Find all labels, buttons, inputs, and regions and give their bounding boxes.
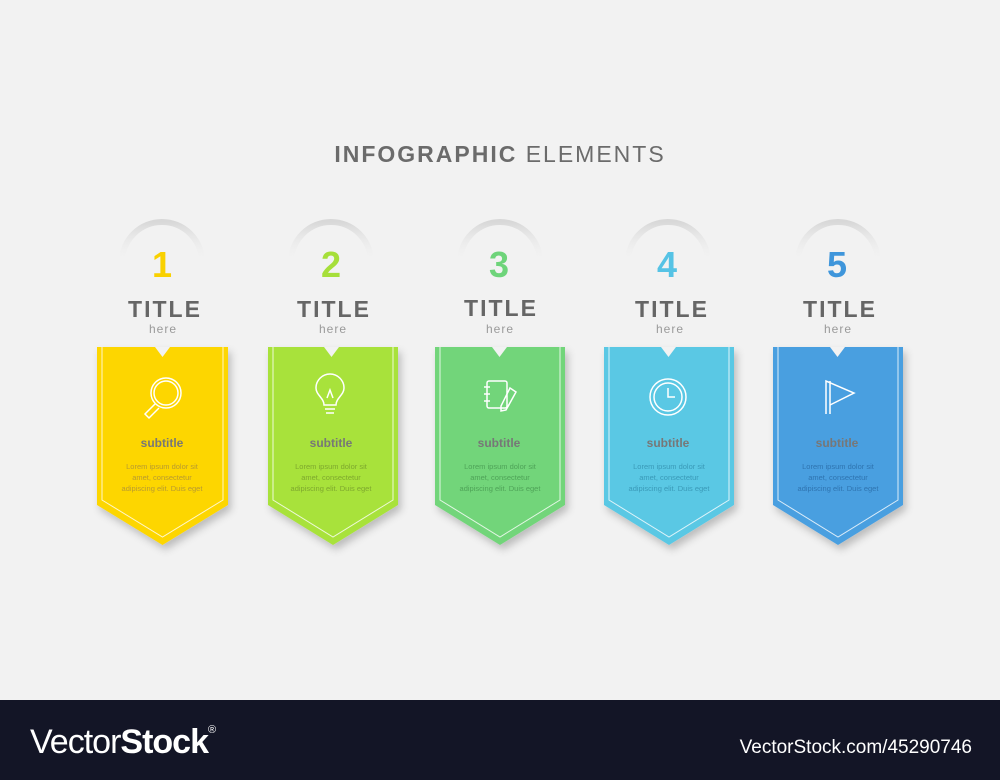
card 5: Lorem ipsum dolor sit <box>802 462 875 471</box>
card 2 <box>268 222 398 545</box>
card 4 <box>604 222 734 545</box>
card 1: amet, consectetur <box>132 473 192 482</box>
icon: flag <box>826 381 854 414</box>
icon: bulb <box>316 374 344 413</box>
card 4: 4 <box>657 244 677 285</box>
card 1: adipiscing elit. Duis eget <box>122 484 203 493</box>
card 2: Lorem ipsum dolor sit <box>295 462 368 471</box>
icon: notebook <box>484 381 516 411</box>
card 1: subtitle <box>141 436 184 450</box>
card 5: 5 <box>827 244 847 285</box>
card 2: subtitle <box>310 436 353 450</box>
icon: magnifier <box>145 378 181 418</box>
footer bar <box>0 700 1000 780</box>
card 5 <box>773 222 903 545</box>
footer bar: ® <box>208 724 216 736</box>
card 1: 1 <box>152 244 172 285</box>
card 1 <box>97 222 228 545</box>
card 2: here <box>319 322 347 336</box>
card 1: TITLE <box>128 296 202 322</box>
footer bar: VectorStock.com/45290746 <box>740 737 972 758</box>
card 4: here <box>656 322 684 336</box>
title: INFOGRAPHIC ELEMENTS <box>334 141 666 167</box>
card 4: subtitle <box>647 436 690 450</box>
card 3: subtitle <box>478 436 521 450</box>
card 4: amet, consectetur <box>639 473 699 482</box>
card 5: adipiscing elit. Duis eget <box>798 484 879 493</box>
card 1: Lorem ipsum dolor sit <box>126 462 199 471</box>
card 5: TITLE <box>803 296 877 322</box>
card 4: adipiscing elit. Duis eget <box>629 484 710 493</box>
card 3: Lorem ipsum dolor sit <box>464 462 537 471</box>
card 3: amet, consectetur <box>470 473 530 482</box>
card 3: TITLE <box>464 295 538 321</box>
card 2: 2 <box>321 244 341 285</box>
card 3: 3 <box>489 244 509 285</box>
footer bar: VectorStock <box>30 723 208 761</box>
icon: clock <box>650 379 686 415</box>
card 5: here <box>824 322 852 336</box>
card 2: amet, consectetur <box>301 473 361 482</box>
card 2: TITLE <box>297 296 371 322</box>
card 5: amet, consectetur <box>808 473 868 482</box>
card 4: TITLE <box>635 296 709 322</box>
card 4: Lorem ipsum dolor sit <box>633 462 706 471</box>
card 2: adipiscing elit. Duis eget <box>291 484 372 493</box>
card 3: here <box>486 322 514 336</box>
card 3 <box>435 222 565 545</box>
card 1: here <box>149 322 177 336</box>
card 5: subtitle <box>816 436 859 450</box>
card 3: adipiscing elit. Duis eget <box>460 484 541 493</box>
